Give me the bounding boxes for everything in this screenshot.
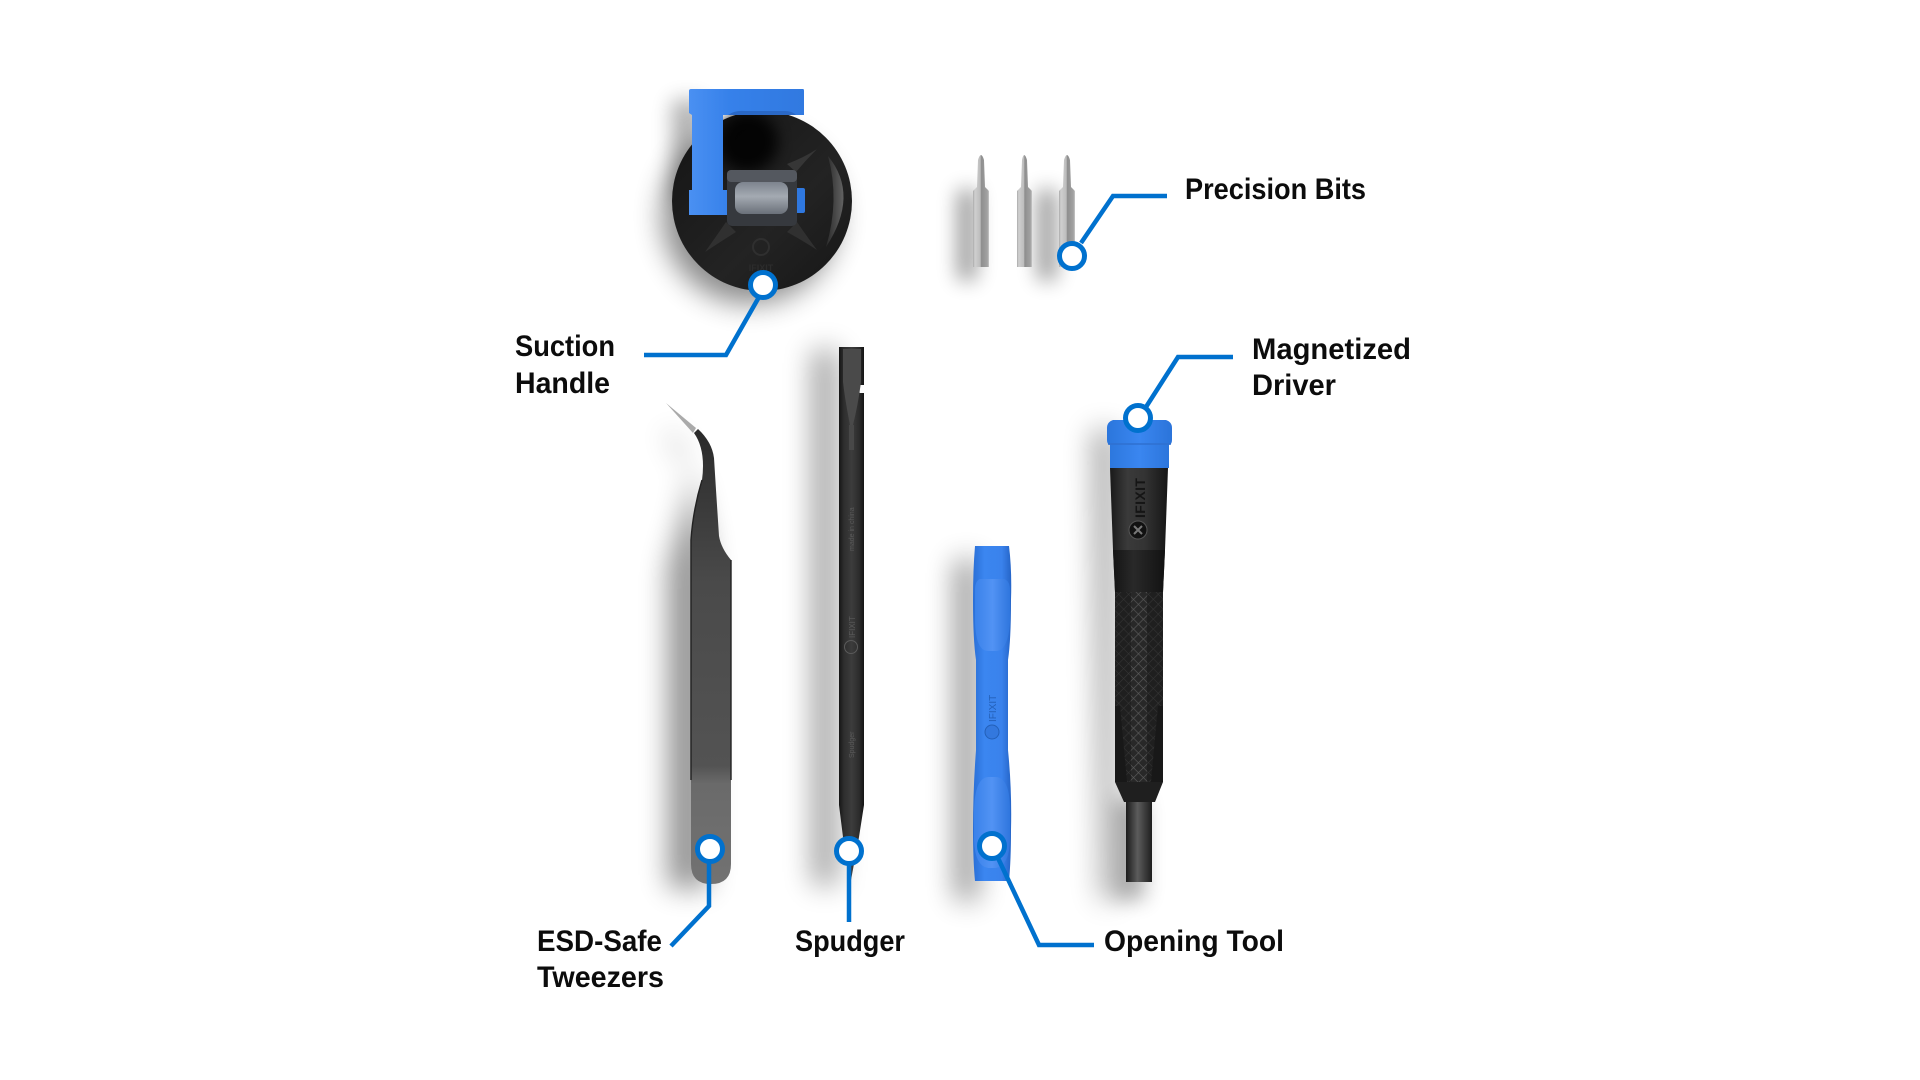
tool: suction handle <box>662 89 852 304</box>
callout: magnetized driver <box>1126 333 1411 430</box>
opening tool lower panel <box>974 777 1010 868</box>
callout: suction handle <box>515 272 776 400</box>
bit 3 <box>1059 155 1075 267</box>
callout: magnetized driver: Magnetized <box>1252 333 1411 366</box>
callout: precision bits: Precision Bits <box>1185 173 1366 206</box>
spudger neck <box>849 425 854 450</box>
spudger flat head <box>843 349 861 425</box>
opening tool upper panel <box>975 579 1010 651</box>
driver logo <box>1129 478 1148 539</box>
spudger engraving: Spudger <box>849 731 856 758</box>
blue handle <box>689 89 804 215</box>
tool: opening tool <box>955 546 1011 900</box>
suction cup disc <box>672 111 852 291</box>
callout: opening tool: Opening Tool <box>1104 925 1284 958</box>
driver knurled section <box>1115 592 1163 782</box>
tweezers edges <box>691 480 731 780</box>
callout: magnetized driver: Driver <box>1252 369 1337 402</box>
tweezers tip <box>666 403 696 433</box>
callout: esd-safe tweezers: ESD-Safe <box>537 925 662 958</box>
driver grip <box>1110 468 1168 592</box>
spudger engraving <box>844 507 858 758</box>
callout: suction handle: Handle <box>515 367 610 400</box>
callout: spudger <box>795 838 905 958</box>
tool: tweezers <box>664 403 731 888</box>
callout: spudger: Spudger <box>795 925 905 958</box>
opening tool body <box>973 546 1011 881</box>
callout: precision bits <box>1060 173 1366 268</box>
callout: suction handle: Suction <box>515 330 615 363</box>
tool: magnetized driver <box>1092 420 1172 900</box>
driver logo: IFIXIT <box>1132 478 1148 518</box>
opening tool logo: IFIXIT <box>988 695 999 722</box>
blue pin <box>780 188 805 213</box>
callout: esd-safe tweezers: Tweezers <box>537 961 664 994</box>
cup details <box>705 112 844 273</box>
driver shaft <box>1126 802 1152 882</box>
callout: esd-safe tweezers <box>537 836 722 994</box>
tweezers body <box>691 429 731 884</box>
driver blue cap <box>1107 420 1172 468</box>
cup details: IFIXIT <box>749 263 774 273</box>
spudger engraving: made in china <box>849 507 856 551</box>
callout: opening tool <box>980 834 1284 958</box>
bit 2 <box>1017 155 1032 267</box>
translucent roller <box>727 170 797 226</box>
tool: precision bits <box>958 155 1075 280</box>
bit 1 <box>973 155 989 267</box>
spudger engraving: IFIXIT <box>848 616 857 638</box>
opening tool logo <box>985 695 999 739</box>
tool: spudger <box>812 347 864 885</box>
driver taper <box>1115 782 1163 802</box>
spudger body <box>839 347 864 880</box>
